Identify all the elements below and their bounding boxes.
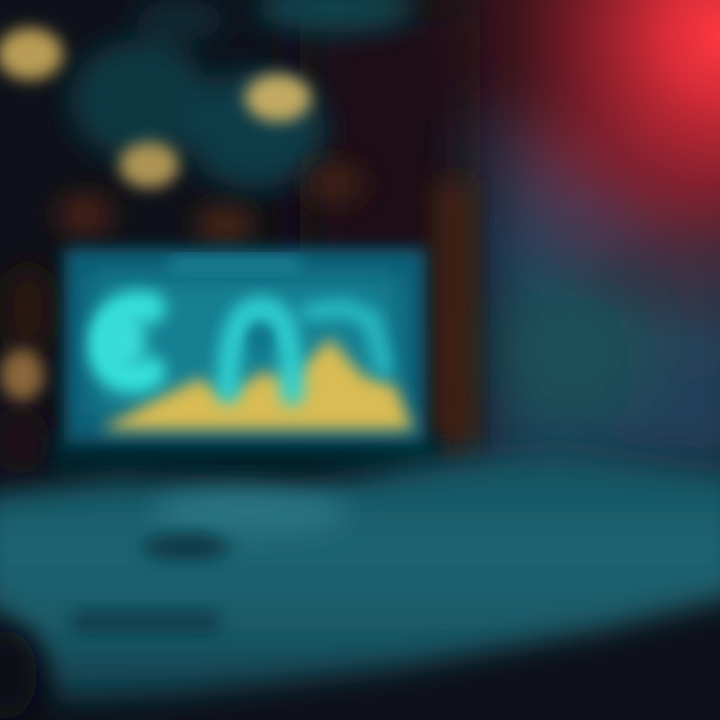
teal background blobs	[70, 0, 415, 190]
screen glow	[90, 275, 400, 415]
chart: cyan curves	[104, 307, 384, 394]
screen title	[170, 258, 300, 272]
chart: yellow area	[100, 338, 414, 430]
warm brown bokeh lights	[0, 163, 365, 475]
brown pillar	[436, 180, 472, 450]
panel: right wall	[480, 100, 720, 480]
desk surface	[0, 450, 720, 720]
keyboard shadow upper	[142, 533, 230, 561]
desk shadow left	[0, 630, 37, 720]
chart: cyan fill spot	[98, 310, 146, 370]
desk highlight	[150, 488, 350, 536]
red glow	[400, 0, 720, 350]
monitor shadow	[50, 435, 440, 471]
warm dark centre	[300, 0, 480, 460]
chart: dark arch center	[249, 326, 271, 354]
monitor screen	[64, 248, 426, 444]
monitor	[50, 248, 440, 471]
keyboard shadow lower	[70, 610, 220, 634]
yellow bokeh lights	[0, 28, 311, 401]
